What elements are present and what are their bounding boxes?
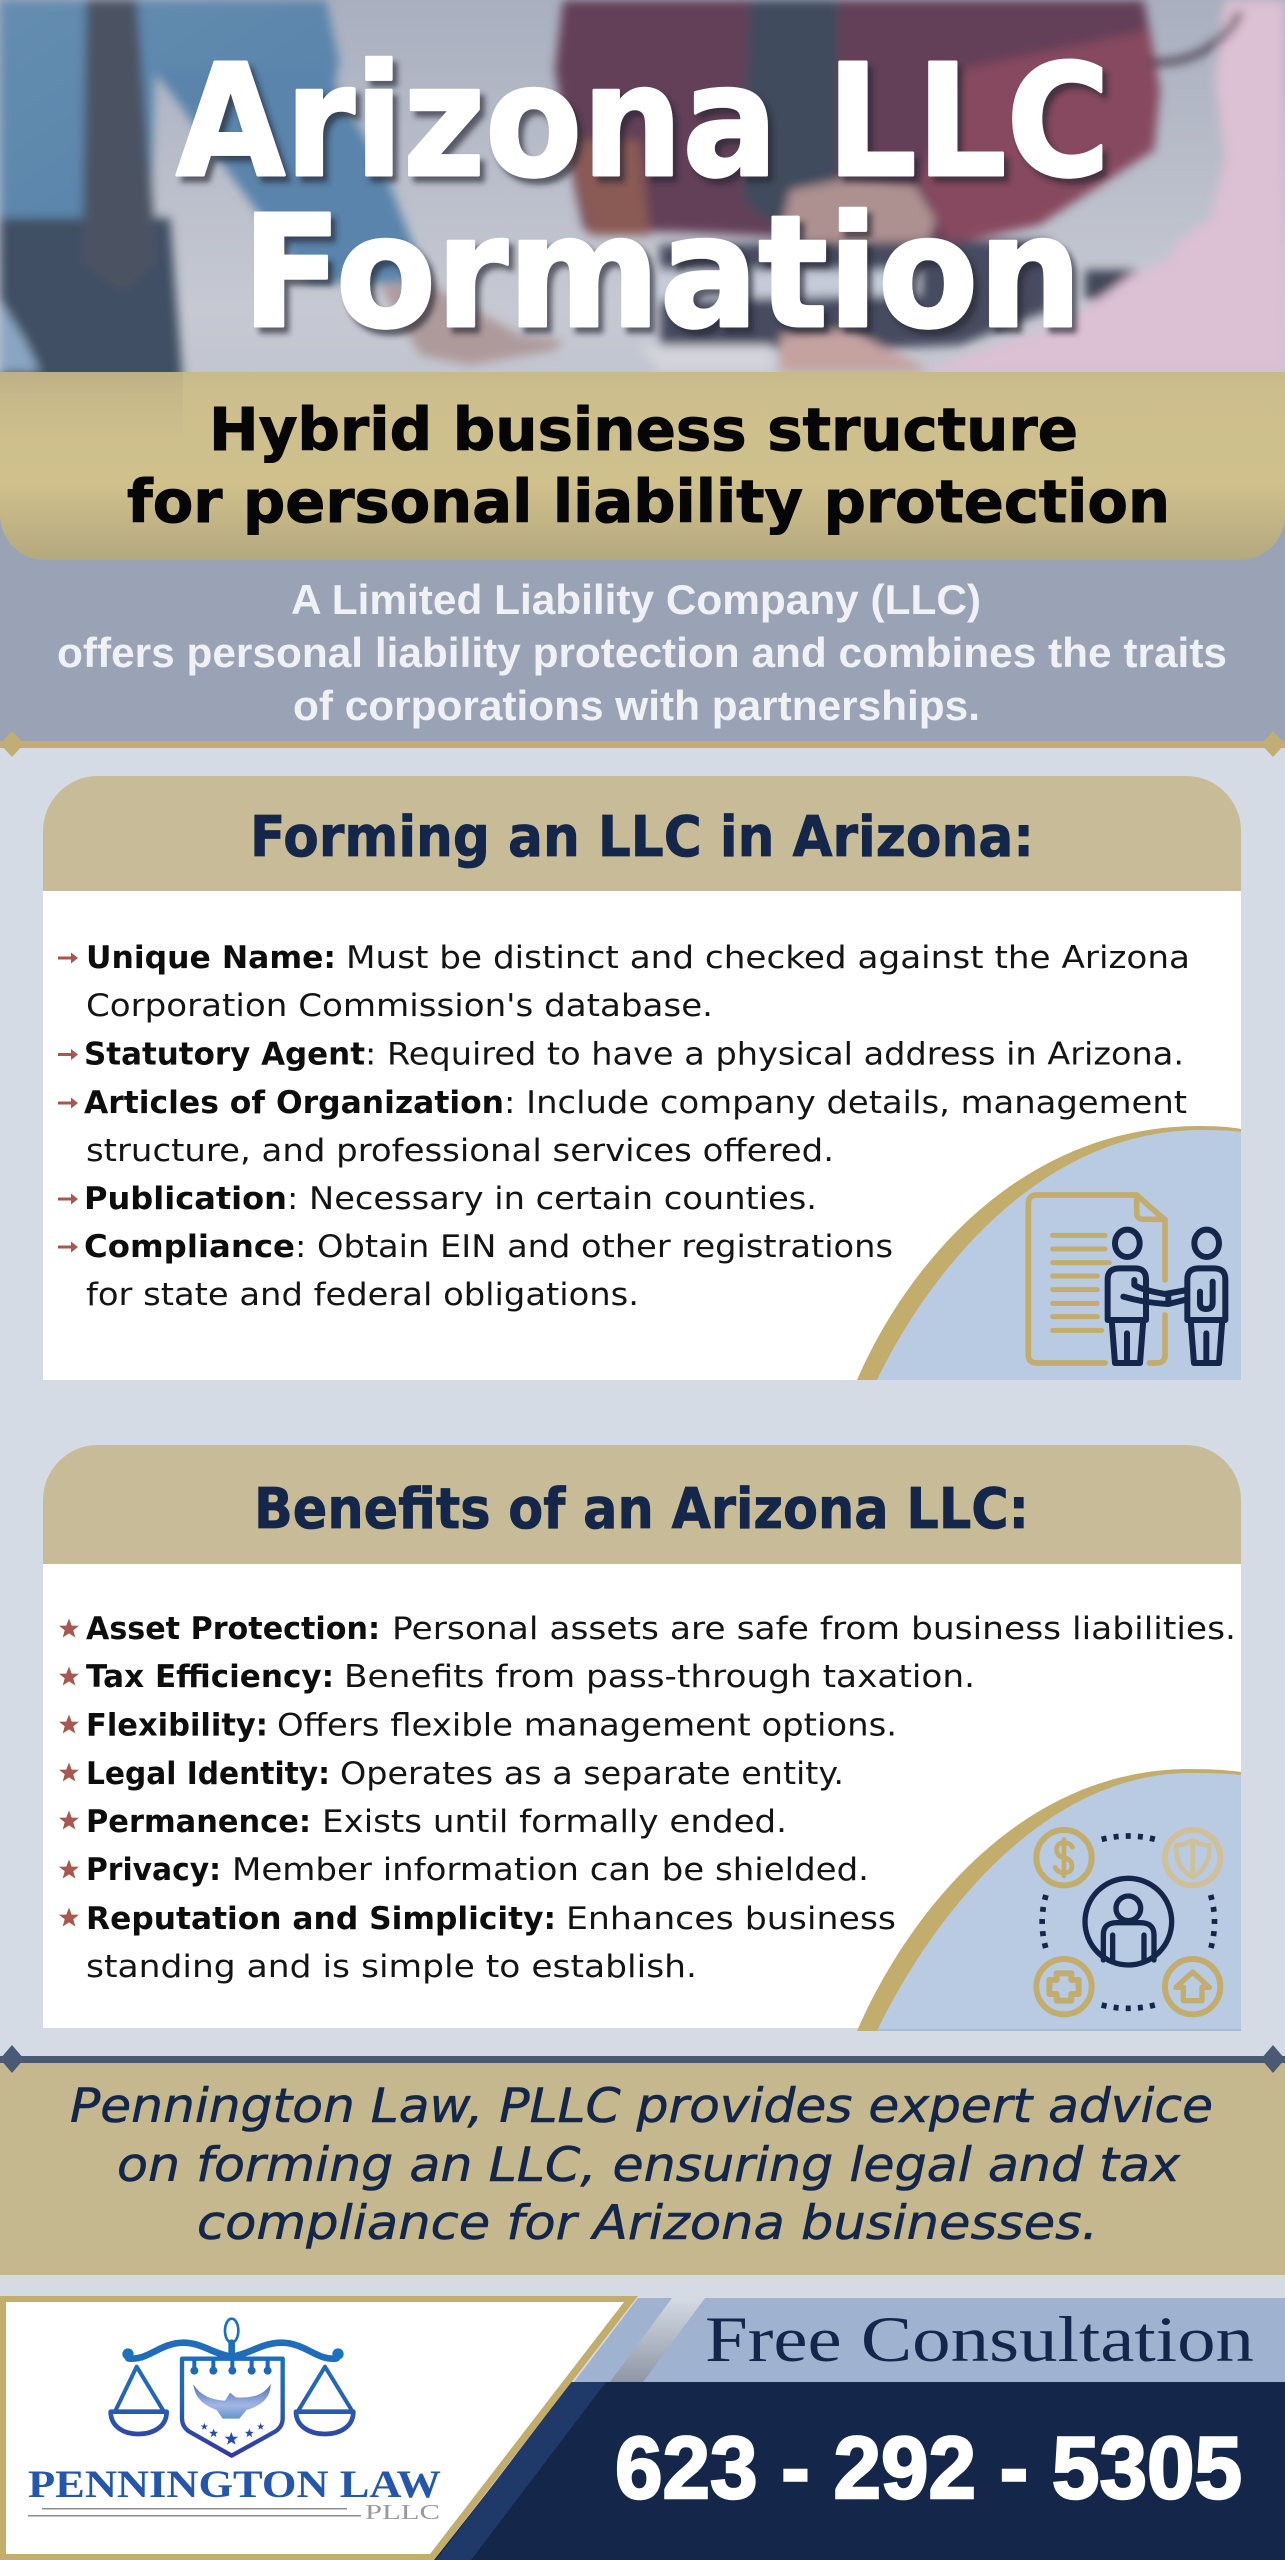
list: steps: structure, and professional services offered.: [86, 1133, 834, 1169]
list: steps: : Necessary in certain counties.: [287, 1181, 817, 1217]
divider: navy bar with diamonds: [0, 2045, 1285, 2073]
list: benefits: Tax Efficiency:: [86, 1659, 334, 1695]
heading: Forming an LLC in Arizona:: [250, 805, 1034, 870]
title: Formation: [242, 182, 1082, 363]
list: steps: : Required to have a physical address in Arizona.: [365, 1036, 1184, 1072]
title: [176, 31, 1110, 363]
list: steps: Publication: [84, 1181, 287, 1217]
list: steps: [58, 940, 1190, 1313]
icon: document and handshake: [1028, 1195, 1225, 1363]
list: benefits: Offers flexible management options.: [277, 1708, 897, 1744]
list: benefits: Permanence:: [86, 1804, 311, 1840]
list: steps: Compliance: [84, 1229, 295, 1265]
subtitle: for personal liability protection: [127, 467, 1170, 536]
panel: benefits of an LLC: [43, 1445, 1241, 2031]
intro text: of corporations with partnerships.: [293, 682, 980, 729]
list: benefits: Privacy:: [86, 1852, 221, 1888]
subtitle: Hybrid business structure: [209, 395, 1078, 464]
list: benefits: Exists until formally ended.: [322, 1804, 787, 1840]
list: steps: for state and federal obligations.: [86, 1277, 639, 1313]
firm message text: [70, 2079, 1213, 2251]
intro text: [57, 576, 1227, 729]
panel: header photo of business people: [0, 0, 1285, 372]
list: benefits: Member information can be shielded.: [232, 1852, 869, 1888]
free consultation label: Free Consultation: [705, 2304, 1254, 2376]
firm message text: compliance for Arizona businesses.: [197, 2196, 1098, 2251]
panel: forming an LLC: [43, 776, 1241, 1380]
corner arc: [857, 1126, 1241, 1380]
list: steps: Statutory Agent: [84, 1036, 365, 1072]
list: steps: Must be distinct and checked against the Arizona: [346, 940, 1190, 976]
title: Arizona LLC: [176, 31, 1110, 212]
logo wordmark: [28, 2463, 441, 2524]
panel: logo card: [0, 2296, 638, 2560]
list: steps: : Include company details, management: [504, 1085, 1187, 1121]
logo wordmark: PLLC: [365, 2500, 440, 2524]
list: benefits: standing and is simple to establish.: [86, 1949, 697, 1985]
card header: [43, 1445, 1241, 1564]
footer light band: [574, 2298, 1285, 2382]
card body: [43, 1555, 1241, 2028]
panel: contact footer: [434, 2298, 1285, 2560]
intro text: A Limited Liability Company (LLC): [291, 576, 981, 623]
list: benefits: Benefits from pass-through taxation.: [344, 1659, 975, 1695]
icon: person with surrounding benefits: [1036, 1830, 1220, 2014]
subtitle: [127, 395, 1170, 536]
card header: [43, 776, 1241, 891]
heading: Benefits of an Arizona LLC:: [254, 1477, 1029, 1542]
logo emblem: scales and shield: [111, 2319, 353, 2456]
list: benefits: Enhances business: [566, 1901, 896, 1937]
footer shadow stripe: [610, 2298, 705, 2382]
list: benefits: [59, 1611, 1236, 1985]
list: benefits: Operates as a separate entity.: [340, 1756, 844, 1792]
intro text: offers personal liability protection and combines the traits: [57, 629, 1227, 676]
footer stripe: [436, 2382, 606, 2560]
divider: gold bar with diamonds: [0, 731, 1285, 757]
list: steps: Corporation Commission's database.: [86, 988, 713, 1024]
list: benefits: Personal assets are safe from business liabilities.: [392, 1611, 1236, 1647]
list: steps: Articles of Organization: [84, 1085, 504, 1121]
panel: blue intro band: [0, 500, 1285, 741]
logo wordmark: PENNINGTON LAW: [28, 2463, 441, 2506]
corner arc: [857, 1769, 1241, 2031]
card body: [43, 885, 1241, 1380]
list: benefits: Legal Identity:: [86, 1756, 330, 1792]
firm message text: Pennington Law, PLLC provides expert advice: [70, 2079, 1213, 2134]
footer navy band: [434, 2382, 1285, 2560]
panel: gold subtitle band: [0, 372, 1285, 560]
phone number: 623 - 292 - 5305: [615, 2418, 1242, 2517]
list: benefits: Reputation and Simplicity:: [86, 1901, 556, 1937]
list: benefits: Asset Protection:: [86, 1611, 380, 1647]
firm message text: on forming an LLC, ensuring legal and tax: [117, 2138, 1181, 2193]
list: steps: Unique Name:: [86, 940, 336, 976]
list: benefits: Flexibility:: [86, 1708, 268, 1744]
list: steps: : Obtain EIN and other registrations: [295, 1229, 893, 1265]
panel: firm message band: [0, 2063, 1285, 2275]
